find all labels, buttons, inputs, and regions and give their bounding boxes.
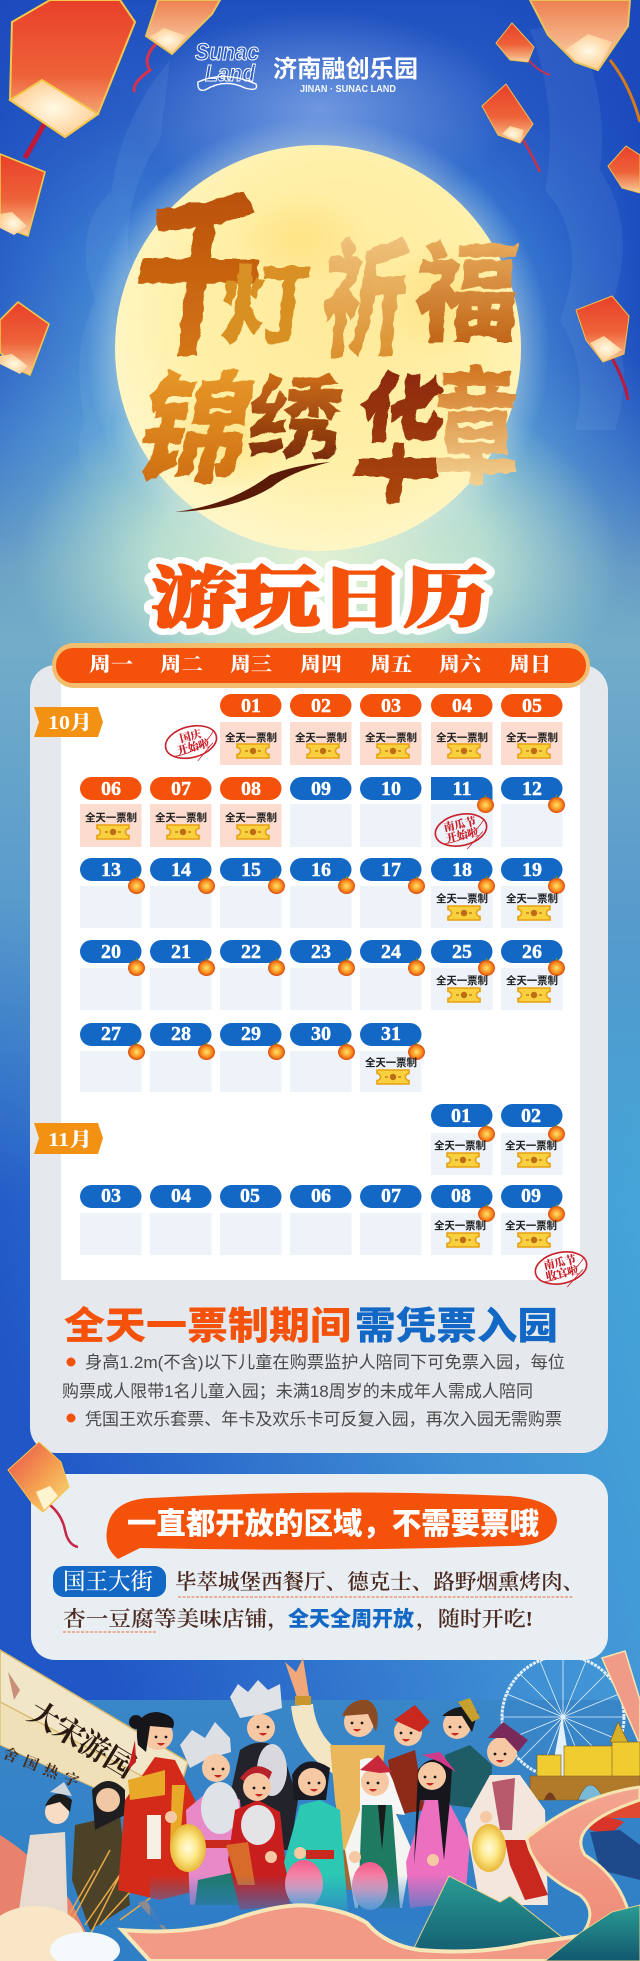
stamp: 南瓜节收官啦 — [532, 1247, 591, 1293]
stamp: 南瓜节收官啦: 南瓜节 — [542, 1252, 577, 1272]
day: Oct 26: 26 — [522, 941, 542, 963]
paper lantern: pink second — [352, 1862, 388, 1910]
tag: 国王大街 — [53, 1566, 166, 1597]
main title: 千灯祈福 锦绣华章: 灯 — [217, 256, 314, 355]
heading: 游玩日历: 游玩日历 — [152, 563, 487, 636]
day: Oct 14 — [150, 858, 215, 928]
figure: man with red hat — [388, 1705, 430, 1815]
left background ground — [0, 1835, 100, 1961]
heading: ticket notice: 全天一票制期间 — [64, 1306, 351, 1348]
day: Oct 02 — [290, 694, 352, 765]
month tag: November — [34, 1123, 103, 1154]
scroll wave bottom — [122, 1905, 640, 1961]
day: Oct 19 — [501, 858, 565, 928]
day: Oct 01: 全天一票制 — [225, 731, 277, 744]
lantern: left middle — [0, 154, 45, 236]
day: Oct 08 — [220, 777, 282, 847]
weekday header: 周二 — [160, 653, 203, 676]
banner: 大宋游园: 舍国热字 — [1, 1744, 81, 1791]
figure: pink Miao woman — [180, 1722, 246, 1905]
day: Nov 03 — [80, 1185, 142, 1255]
day: Oct 26: 全天一票制 — [506, 974, 558, 987]
paper lantern: pink — [285, 1860, 323, 1908]
description text: 毕萃城堡西餐厅、德克士、路野烟熏烤肉、 — [175, 1570, 584, 1594]
brush stroke under title — [175, 462, 330, 512]
day: Oct 11: 11 — [453, 778, 471, 800]
heading: ticket notice — [64, 1306, 558, 1348]
day: Oct 17: 17 — [381, 859, 401, 881]
calendar sheet — [61, 680, 580, 1280]
figure: lady in white — [16, 1782, 72, 1930]
day: Oct 12 — [501, 777, 565, 847]
description text — [63, 1570, 584, 1632]
month tag: October — [34, 707, 103, 737]
day: Oct 20: 20 — [101, 941, 121, 963]
heading: ticket notice: 需凭票入园 — [355, 1306, 558, 1348]
figure: man in white robe — [465, 1722, 548, 1905]
day: Nov 07 — [360, 1185, 422, 1255]
day: Oct 21: 21 — [171, 941, 191, 963]
day: Oct 10 — [360, 777, 422, 847]
pink tower — [602, 1651, 640, 1745]
day: Oct 25: 全天一票制 — [436, 974, 488, 987]
day: Oct 05: 05 — [522, 695, 542, 717]
day: Oct 27 — [80, 1023, 145, 1092]
logo mark: Sunac Land: Sunac — [195, 39, 259, 66]
day: Oct 28 — [150, 1023, 215, 1092]
day: Oct 02: 02 — [311, 695, 331, 717]
day: Oct 18: 18 — [452, 859, 472, 881]
day: Nov 08: 全天一票制 — [434, 1219, 486, 1232]
day: Oct 04 — [431, 694, 492, 765]
day: Oct 09 — [290, 777, 352, 847]
logo mark: Sunac Land — [195, 39, 259, 90]
day: Oct 26 — [501, 940, 565, 1010]
heading: 游玩日历: 游玩日历 — [152, 563, 487, 636]
day: Oct 01 — [220, 694, 282, 765]
stamp: 南瓜节开始啦: 南瓜节 — [442, 814, 477, 834]
day: Nov 08 — [431, 1185, 495, 1255]
lantern: left lower — [0, 302, 49, 375]
main title: 千灯祈福 锦绣华章: 锦 — [124, 363, 267, 498]
day: Oct 16: 16 — [311, 859, 331, 881]
day: Nov 06: 06 — [311, 1185, 331, 1207]
day: Oct 07: 07 — [171, 778, 191, 800]
day: Oct 31 — [360, 1023, 425, 1092]
day: Oct 11 — [431, 777, 494, 847]
weekday header: 周三 — [230, 653, 272, 676]
day: Oct 31: 31 — [381, 1023, 401, 1045]
day: Oct 13 — [80, 858, 145, 928]
day: Oct 15: 15 — [241, 859, 261, 881]
day: Nov 01 — [431, 1104, 495, 1175]
day: Nov 05 — [220, 1185, 282, 1255]
ticket rules text: 购票成人限带1名儿童入园；未满18周岁的未成年人需成人陪同 — [62, 1382, 533, 1401]
day: Oct 05 — [501, 694, 562, 765]
mountains — [412, 1876, 568, 1961]
lantern: top left large — [10, 0, 135, 158]
description text: ，随时开吃! — [416, 1607, 533, 1632]
day: Oct 23 — [290, 940, 355, 1010]
day: Oct 31: 全天一票制 — [365, 1056, 417, 1069]
stamp: 国庆开始啦: 国庆 — [178, 726, 203, 745]
weekday header: 周四 — [300, 653, 342, 676]
day: Oct 17 — [360, 858, 425, 928]
ticket rules text: 身高1.2m(不含)以下儿童在购票监护人陪同下可免票入园，每位 — [85, 1353, 565, 1372]
figure: man in teal coat — [442, 1698, 492, 1810]
lantern: right mid — [482, 84, 540, 172]
day: Oct 02: 全天一票制 — [295, 731, 347, 744]
day: Oct 13: 13 — [101, 859, 121, 881]
ticket rules text — [62, 1353, 565, 1429]
main title: 千灯祈福 锦绣华章 — [120, 181, 523, 520]
day: Nov 01: 01 — [451, 1105, 471, 1127]
stamp: 南瓜节开始啦: 开始啦 — [444, 825, 480, 845]
day: Oct 01: 01 — [241, 695, 261, 717]
day: Nov 06 — [290, 1185, 352, 1255]
day: Oct 24 — [360, 940, 425, 1010]
lantern: panel corner — [8, 1442, 78, 1547]
day: Oct 03 — [360, 694, 422, 765]
logo subtitle: JINAN · SUNAC LAND — [300, 84, 396, 95]
logo name: 济南融创乐园 — [273, 56, 418, 83]
day: Oct 25 — [431, 940, 495, 1010]
day: Oct 10: 10 — [381, 778, 401, 800]
day: Oct 29 — [220, 1023, 285, 1092]
day: Oct 08: 08 — [241, 778, 261, 800]
ferris wheel — [502, 1656, 624, 1780]
day: Oct 14: 14 — [171, 859, 191, 881]
castle — [530, 1722, 640, 1800]
day: Oct 24: 24 — [381, 941, 401, 963]
weekday header: 周日 — [509, 653, 551, 676]
day: Oct 07 — [150, 777, 212, 847]
day: Oct 09: 09 — [311, 778, 331, 800]
day: Oct 06 — [80, 777, 142, 847]
day: Nov 02 — [501, 1104, 565, 1175]
day: Nov 02: 02 — [521, 1105, 541, 1127]
day: Nov 09 — [501, 1185, 565, 1255]
weekday header: 周五 — [370, 653, 412, 676]
main title: 千灯祈福 锦绣华章: 千 — [120, 181, 275, 377]
moon — [86, 116, 550, 580]
figure: pink dress woman — [406, 1752, 470, 1908]
day: Nov 08: 08 — [451, 1185, 471, 1207]
day: Oct 18 — [431, 858, 495, 928]
day: Oct 18: 全天一票制 — [436, 892, 488, 905]
pink scroll ribbon right — [527, 1787, 640, 1942]
day: Oct 08: 全天一票制 — [225, 811, 277, 824]
description text: 杏一豆腐等美味店铺， — [63, 1607, 290, 1632]
day: Nov 04: 04 — [171, 1185, 191, 1207]
main title: 千灯祈福 锦绣华章: 祈 — [315, 231, 414, 373]
day: Oct 07: 全天一票制 — [155, 811, 207, 824]
figure: red Miao woman — [226, 1766, 290, 1910]
stamp: 南瓜节开始啦 — [432, 809, 491, 855]
main title: 千灯祈福 锦绣华章: 福 — [411, 234, 523, 355]
figure lower fade — [150, 1875, 460, 1925]
logo mark: Sunac Land: Land — [205, 60, 256, 86]
day: Oct 05: 全天一票制 — [506, 731, 558, 744]
main title: 千灯祈福 锦绣华章: 华 — [347, 364, 451, 520]
main title: 千灯祈福 锦绣华章: 章 — [434, 359, 519, 499]
day: Oct 03: 03 — [381, 695, 401, 717]
logo — [195, 39, 418, 95]
lantern: right lower — [576, 296, 629, 400]
day: Oct 12: 12 — [522, 778, 542, 800]
stamp: 国庆开始啦: 开始啦 — [175, 736, 211, 757]
banner: 大宋游园 — [0, 1650, 188, 1815]
day: Nov 07: 07 — [381, 1185, 401, 1207]
banner: 大宋游园: 大宋游园 — [22, 1696, 141, 1785]
figure: warrior — [60, 1781, 175, 1942]
day: Oct 06: 06 — [101, 778, 121, 800]
decorative cloud curtains — [79, 20, 624, 480]
day: Nov 04 — [150, 1185, 212, 1255]
weekday header: 周六 — [439, 653, 484, 676]
banner: no ticket needed — [106, 1492, 557, 1559]
day: Nov 05: 05 — [240, 1185, 260, 1207]
description text: 全天全周开放 — [288, 1607, 414, 1631]
figure: black top Miao woman — [229, 1680, 298, 1850]
day: Nov 03: 03 — [101, 1185, 121, 1207]
lantern: upper right small — [496, 23, 550, 75]
day: Oct 16 — [290, 858, 355, 928]
day: Oct 30 — [290, 1023, 355, 1092]
paper lantern: yellow left — [170, 1824, 206, 1872]
day: Oct 20 — [80, 940, 145, 1010]
illustration: bottom scene — [0, 1650, 640, 1961]
day: Nov 09: 09 — [521, 1185, 541, 1207]
figure: man raising arm — [285, 1658, 385, 1890]
lantern: right edge — [608, 146, 640, 193]
banner: no ticket needed: 一直都开放的区域，不需要票哦 — [127, 1508, 539, 1541]
day: Oct 19: 全天一票制 — [506, 892, 558, 905]
day: Oct 04: 04 — [452, 695, 472, 717]
day: Nov 02: 全天一票制 — [505, 1139, 557, 1152]
day: Oct 23: 23 — [311, 941, 331, 963]
figure: green vest woman — [345, 1755, 412, 1908]
stamp: 南瓜节收官啦: 收官啦 — [544, 1263, 580, 1283]
day: Oct 21 — [150, 940, 215, 1010]
day: Oct 25: 25 — [452, 941, 472, 963]
tag: 国王大街: 国王大街 — [63, 1569, 153, 1594]
paper lantern: yellow right — [472, 1824, 506, 1872]
figure: red hanfu woman — [118, 1712, 200, 1900]
day: Oct 06: 全天一票制 — [85, 811, 137, 824]
lantern: top right large — [530, 0, 640, 122]
day: Nov 01: 全天一票制 — [434, 1139, 486, 1152]
main title: 千灯祈福 锦绣华章: 绣 — [245, 369, 346, 472]
day: Oct 29: 29 — [241, 1023, 261, 1045]
day: Oct 19: 19 — [522, 859, 542, 881]
month tag: November: 11月 — [48, 1128, 92, 1151]
day: Oct 22: 22 — [241, 941, 261, 963]
ticket rules text: 凭国王欢乐套票、年卡及欢乐卡可反复入园，再次入园无需购票 — [85, 1410, 562, 1429]
lantern: top left small — [134, 0, 220, 92]
day: Nov 09: 全天一票制 — [505, 1219, 557, 1232]
day: Oct 15 — [220, 858, 285, 928]
cream clouds — [0, 1906, 120, 1961]
stamp: 国庆开始啦 — [162, 721, 221, 768]
day: Oct 04: 全天一票制 — [436, 731, 488, 744]
day: Oct 30: 30 — [311, 1023, 331, 1045]
weekday header — [52, 643, 590, 688]
right pavilion and character — [586, 1800, 640, 1880]
mountain right corner — [545, 1905, 640, 1961]
month tag: October: 10月 — [48, 711, 92, 734]
day: Oct 27: 27 — [101, 1023, 121, 1045]
weekday header: 周一 — [89, 653, 133, 676]
figure: teal dress woman — [284, 1761, 348, 1912]
panel: calendar — [30, 665, 608, 1453]
day: Oct 22 — [220, 940, 285, 1010]
day: Oct 03: 全天一票制 — [365, 731, 417, 744]
day: Oct 28: 28 — [171, 1023, 191, 1045]
panel: always open areas — [31, 1474, 608, 1660]
